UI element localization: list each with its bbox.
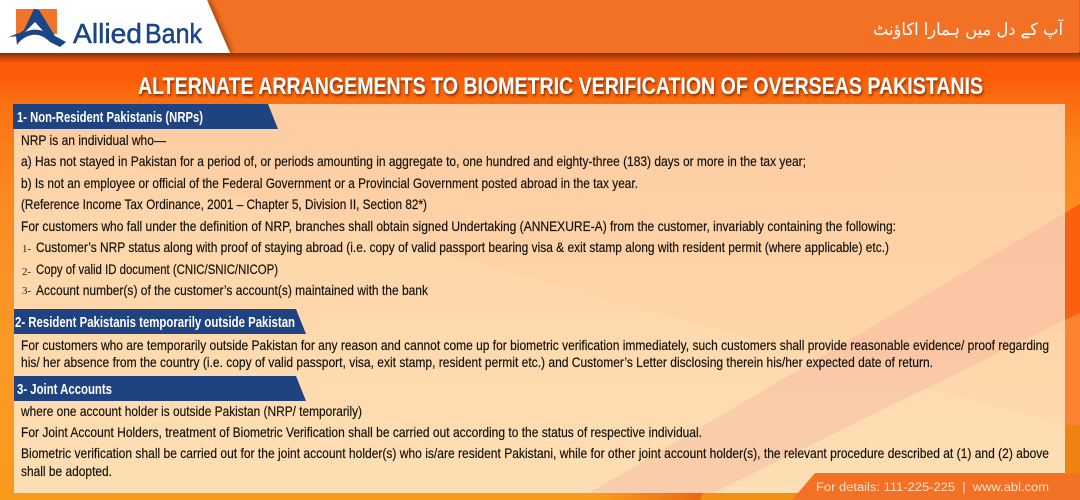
- section 1 list: 3-: [22, 286, 31, 297]
- section 1 heading: 1- Non-Resident Pakistanis (NRPs): [17, 110, 203, 126]
- section 1 text: b) Is not an employee or official of the Federal Government or a Provincial Government posted abroad in the tax year.: [21, 175, 638, 191]
- header band: [0, 0, 1080, 63]
- section 3 text: shall be adopted.: [21, 463, 112, 479]
- footer contact bar: [792, 473, 1080, 500]
- logo wordmark: Bank: [145, 18, 203, 49]
- section 1 text: [21, 132, 896, 234]
- logo area: [0, 0, 230, 53]
- icon: Allied Bank logo: [7, 9, 66, 47]
- section 1 text: a) Has not stayed in Pakistan for a period of, or periods amounting in aggregate to, one hundred and eighty-three (183) days or more in the tax year;: [21, 153, 806, 169]
- section 1 list: 1-: [22, 244, 31, 255]
- section 2: resident pakistanis temporarily outside pakistan: [14, 309, 1049, 370]
- section 3 text: [20, 403, 1049, 479]
- section 2 text: [21, 337, 1049, 370]
- logo wordmark: [73, 18, 203, 49]
- section 1 text: For customers who fall under the definition of NRP, branches shall obtain signed Undertaking (ANNEXURE-A) from the customer, invariably containing the following:: [21, 218, 896, 234]
- section 1 text: NRP is an individual who—: [21, 132, 166, 148]
- section 3 heading: [14, 376, 306, 401]
- section 1: non-resident pakistanis: [13, 104, 896, 298]
- footer contact bar: For details: 111-225-225 | www.abl.com: [816, 482, 1049, 494]
- section 3 heading: 3- Joint Accounts: [17, 382, 112, 398]
- section 3 text: For Joint Account Holders, treatment of Biometric Verification shall be carried out according to the status of respective individual.: [21, 424, 702, 440]
- content panel: [13, 104, 1065, 493]
- section 1 list: [22, 239, 889, 298]
- section 2 heading: [14, 309, 306, 334]
- section 2 text: his/ her absence from the country (i.e. copy of valid passport, visa, exit stamp, resident permit etc.) and Customer’s Letter disclosing therein his/her expected date of return.: [21, 354, 933, 370]
- section 1 list: 2-: [22, 267, 31, 278]
- section 2 heading: 2- Resident Pakistanis temporarily outside Pakistan: [15, 315, 295, 331]
- section 1 list: Customer’s NRP status along with proof of staying abroad (i.e. copy of valid passport bearing visa & exit stamp along with resident permit (where applicable) etc.): [36, 239, 889, 255]
- logo wordmark: Allied: [73, 18, 142, 49]
- section 1 text: (Reference Income Tax Ordinance, 2001 – Chapter 5, Division II, Section 82*): [21, 196, 427, 212]
- section 3: joint accounts: [14, 376, 1049, 479]
- section 3 text: where one account holder is outside Pakistan (NRP/ temporarily): [20, 403, 362, 419]
- urdu tagline: آپ کے دل میں ہمارا اکاؤنٹ: [873, 18, 1064, 40]
- section 1 heading: [13, 104, 278, 129]
- section 1 list: Account number(s) of the customer’s account(s) maintained with the bank: [36, 282, 429, 298]
- section 1 list: Copy of valid ID document (CNIC/SNIC/NICOP): [36, 261, 278, 277]
